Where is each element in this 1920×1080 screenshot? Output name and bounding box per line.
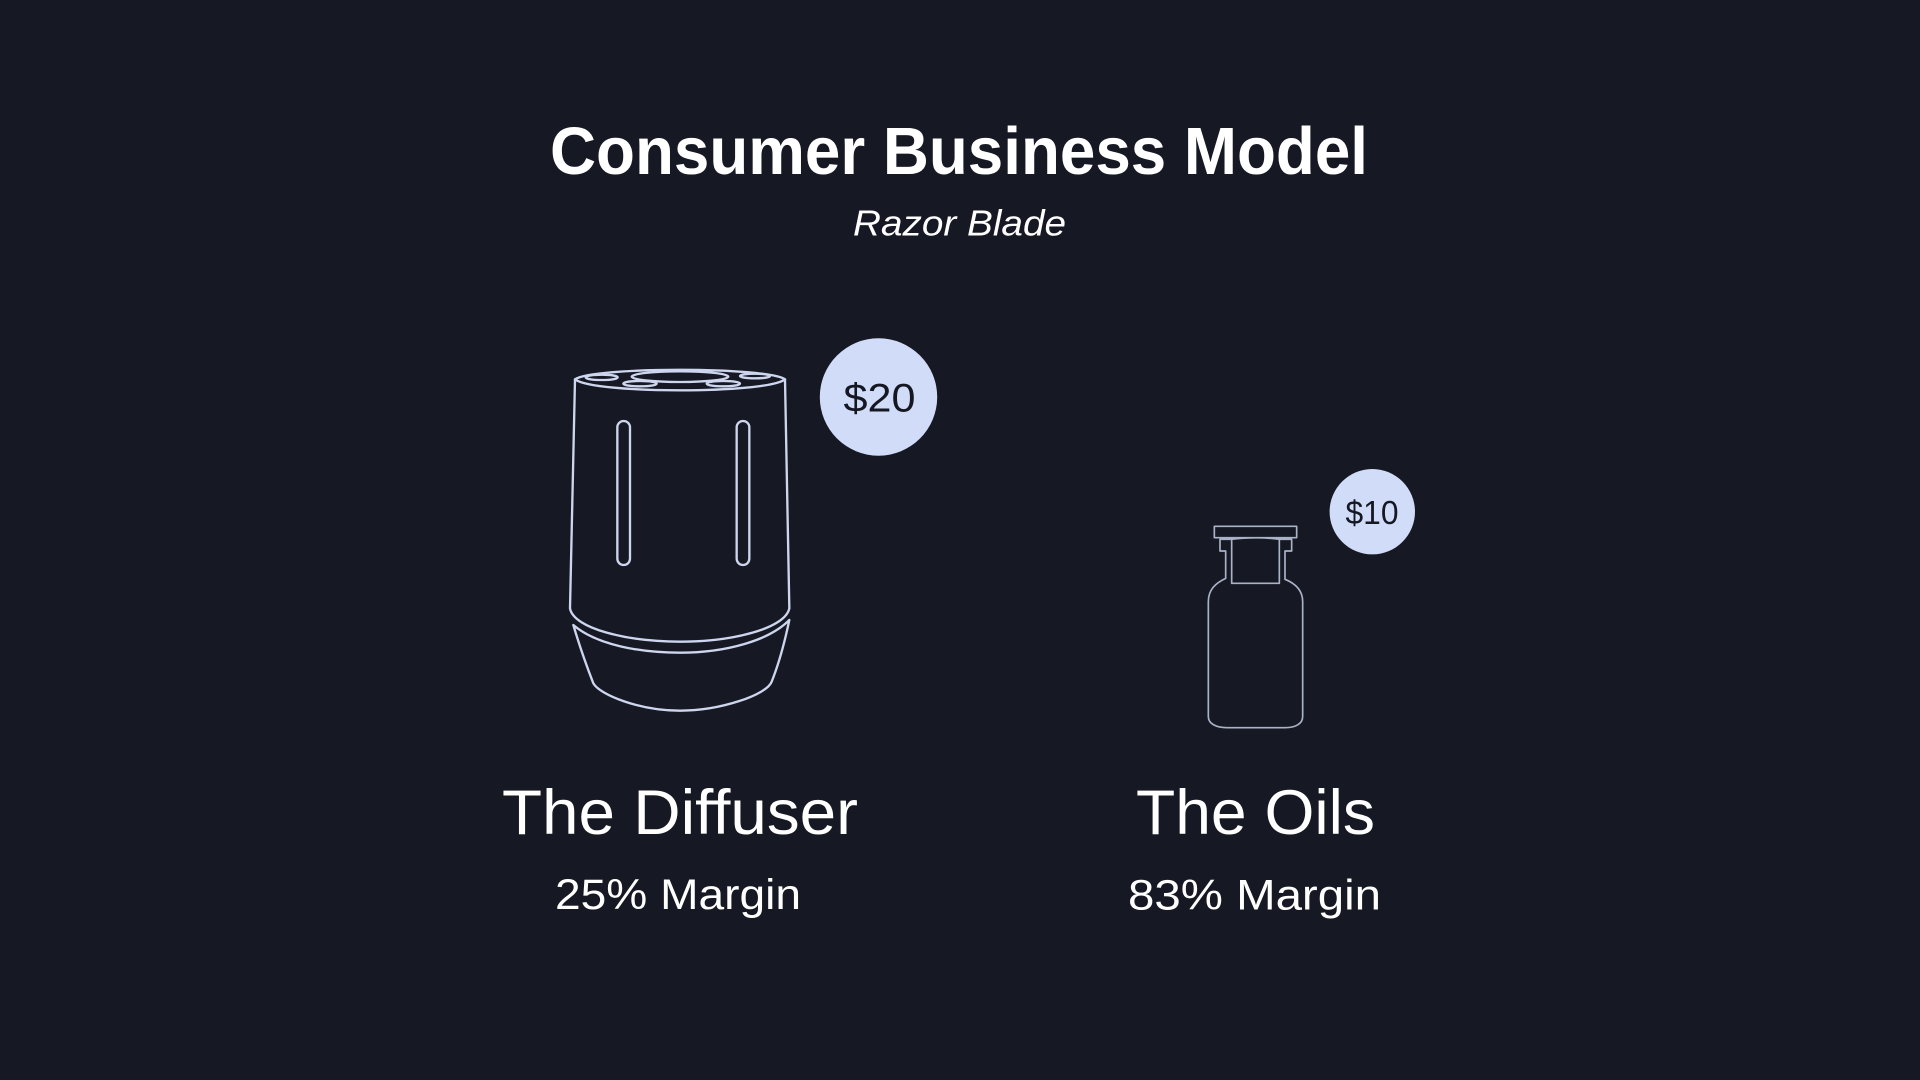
subtitle: Razor Blade	[853, 202, 1066, 244]
label: The Oils: The Oils	[1136, 778, 1375, 848]
label: The Diffuser: The Diffuser	[502, 778, 858, 848]
title: Consumer Business Model	[550, 114, 1368, 189]
icon: oil bottle	[1208, 526, 1303, 728]
label: 25% Margin: 25% Margin	[555, 871, 801, 919]
price badge: $20: $20	[844, 376, 916, 420]
price badge: $20	[820, 338, 937, 456]
label: 83% Margin: 83% Margin	[1128, 872, 1381, 920]
icon: diffuser	[570, 370, 789, 711]
price badge: $10	[1330, 469, 1415, 554]
price badge: $10: $10	[1346, 494, 1398, 531]
